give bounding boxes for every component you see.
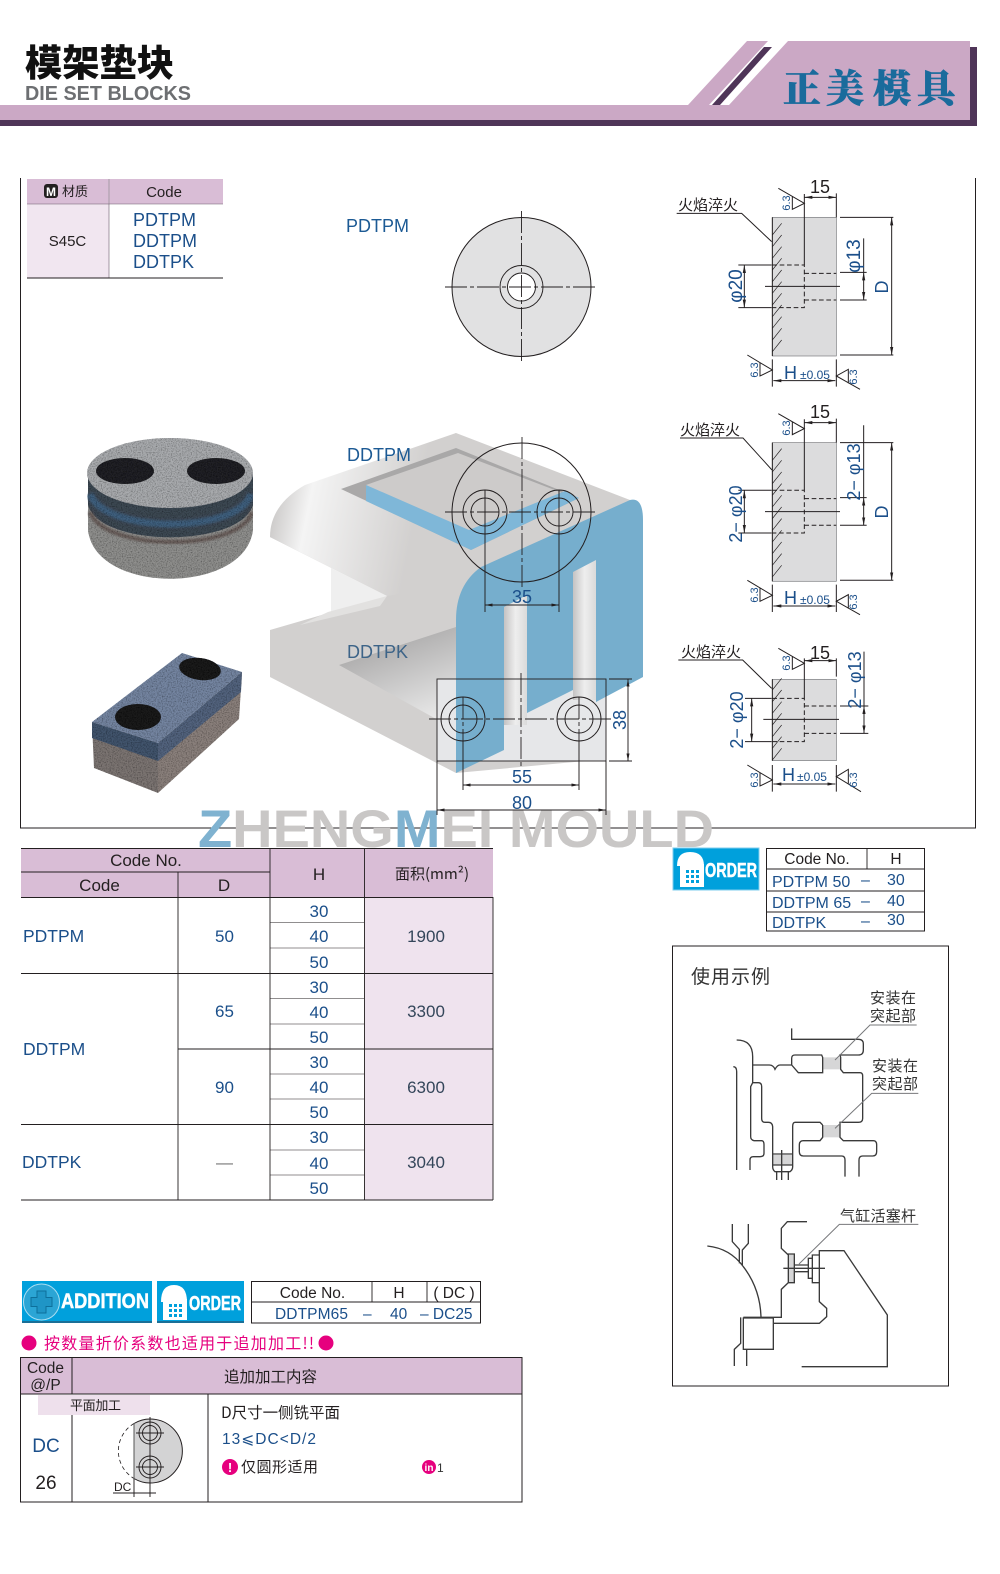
watermark: block logo [270, 433, 643, 773]
dimension H: H [782, 765, 795, 785]
D column: 50 [215, 927, 234, 946]
dimension 15: 15 [810, 402, 830, 422]
table header labels: 面积(mm²) [395, 863, 469, 884]
note: round only: 仅圆形适用 [241, 1456, 318, 1477]
icon: plus disc [24, 1284, 60, 1320]
brand name: 具 [917, 58, 962, 113]
dimension H [782, 765, 827, 785]
D column: 90 [215, 1078, 234, 1097]
diagram: flat milled circle: DC [114, 1480, 132, 1494]
dimension 35: 35 [512, 587, 532, 607]
title: english: DIE SET BLOCKS [25, 83, 191, 105]
code column: DDTPM [23, 1039, 85, 1059]
H column: 30 [310, 1128, 328, 1147]
page header band [0, 33, 977, 126]
dimension 2-phi 20: 2− φ20 [727, 691, 747, 749]
order example table: – [861, 872, 870, 889]
H column [310, 902, 328, 1198]
order badge: ORDER [705, 860, 757, 882]
surface roughness marks: 6.3 [749, 362, 761, 378]
D column: — [216, 1153, 233, 1172]
callout: mount on boss 1 [870, 987, 916, 1026]
surface roughness marks [749, 195, 860, 385]
badge: order: ORDER [189, 1293, 241, 1315]
order example table: Code No. [784, 851, 850, 868]
diagram: upper die section [733, 1025, 918, 1180]
badge: addition [22, 1281, 152, 1323]
main size table [21, 848, 493, 1200]
dimension 55: 55 [512, 767, 532, 787]
watermark text: ZHENGMEI MOULD [198, 800, 714, 859]
photo: rectangular block [92, 653, 242, 793]
code values: DDTPM [133, 231, 197, 251]
description: D尺寸一侧铣平面 [221, 1401, 340, 1423]
lead time badge [422, 1460, 444, 1475]
surface roughness marks: 6.3 [781, 195, 793, 211]
order example table: – [861, 913, 870, 930]
order example table: 30 [887, 872, 905, 889]
table header labels: Code [79, 876, 120, 895]
label: DDTPK: DDTPK [347, 642, 408, 662]
D column [215, 927, 234, 1172]
addition order example table [251, 1281, 481, 1323]
code values [133, 210, 197, 272]
code heading: Code [146, 184, 182, 201]
H column: 30 [310, 902, 328, 921]
usage heading: 使用示例 [691, 962, 770, 989]
flame hardening label: 火焰淬火 [681, 641, 741, 662]
addition order example table: 40 [390, 1306, 408, 1323]
dimension phi 20: φ20 [726, 269, 747, 303]
lead time badge: in [425, 1463, 433, 1474]
order example table: H [890, 851, 902, 868]
area column: 6300 [407, 1078, 445, 1097]
callout: mount on boss 1: 突起部 [870, 1005, 916, 1026]
drawing: DDTPM top view [445, 437, 597, 612]
dimension 80: 80 [512, 793, 532, 813]
material value: S45C [49, 233, 86, 250]
icon: phone [161, 1285, 187, 1320]
order example table [766, 848, 925, 932]
addition order example table: – [363, 1306, 372, 1323]
section drawing: DDTPK [678, 641, 868, 792]
H column: 30 [310, 978, 328, 997]
dimension 2-phi 13: 2− φ13 [844, 443, 864, 501]
order example table: 40 [887, 893, 905, 910]
surface roughness marks: 6.3 [848, 369, 860, 385]
D column: 65 [215, 1002, 234, 1021]
H column: 40 [310, 1078, 328, 1097]
dimension phi 13: φ13 [844, 239, 865, 273]
diagram: cylinder rod section [707, 1222, 918, 1367]
callout: mount on boss 2 [872, 1055, 918, 1094]
brand name: 美 [826, 58, 864, 113]
H column: 50 [310, 1028, 328, 1047]
dimension 38: 38 [610, 710, 630, 730]
surface roughness marks [749, 420, 860, 610]
label: PDTPM: PDTPM [346, 216, 409, 236]
order example table: PDTPM 50 [772, 874, 850, 891]
code column [22, 926, 85, 1172]
brand name: 正 [783, 58, 821, 113]
dimension D: D [872, 506, 892, 518]
surface roughness marks: 6.3 [749, 772, 761, 788]
surface roughness marks: 6.3 [848, 772, 860, 788]
drawing: PDTPM top view [445, 211, 597, 363]
H column: 50 [310, 1103, 328, 1122]
code column: DDTPK [22, 1152, 82, 1172]
addition order example table: Code No. [280, 1285, 345, 1302]
material heading: 材质 [62, 181, 88, 200]
H column: 40 [310, 1003, 328, 1022]
callout: mount on boss 2: 安装在 [872, 1055, 918, 1076]
icon: material badge [44, 184, 58, 199]
dimension H: ±0.05 [800, 368, 830, 382]
area column: 3300 [407, 1002, 445, 1021]
code values: DDTPK [133, 252, 194, 272]
badge: order [157, 1281, 244, 1323]
H column: 50 [310, 1179, 328, 1198]
code column: PDTPM [23, 926, 84, 946]
column header: code [27, 1360, 64, 1394]
dimension D: D [872, 280, 892, 294]
icon: material badge: M [46, 185, 56, 199]
lead time badge: 1 [437, 1461, 444, 1475]
order example table: – [861, 893, 870, 910]
table header labels: H [313, 865, 325, 884]
flame hardening label with leader: 火焰淬火 [680, 419, 740, 440]
badge: addition: ADDITION [61, 1290, 149, 1313]
diagram: flat milled circle [113, 1417, 182, 1497]
H column: 40 [310, 1154, 328, 1173]
surface roughness marks: 6.3 [781, 420, 793, 436]
dimension H: H [784, 363, 797, 383]
pink notice: 按数量折价系数也适用于追加加工!! [44, 1330, 314, 1354]
sub heading: face milling: 平面加工 [70, 1395, 121, 1414]
dimension H: ±0.05 [797, 770, 827, 784]
note: round only: ! [228, 1460, 232, 1475]
callout: mount on boss 1: 安装在 [870, 987, 916, 1008]
panel: usage example [672, 946, 948, 1386]
dimension 15: 15 [810, 643, 830, 663]
area column: 1900 [407, 927, 445, 946]
table header labels [79, 851, 469, 895]
section drawing: PDTPM [677, 177, 893, 389]
callout: mount on boss 2: 突起部 [872, 1073, 918, 1094]
dimension 2-phi 13: 2− φ13 [845, 651, 865, 709]
icon: phone [677, 852, 704, 887]
H column: 50 [310, 953, 328, 972]
dimension H: H [784, 588, 797, 608]
main panel frame [20, 178, 976, 828]
dimension H [784, 363, 830, 383]
callout: cylinder rod: 气缸活塞杆 [840, 1205, 916, 1226]
order example table: 30 [887, 912, 905, 929]
flame hardening label with leader [680, 419, 772, 470]
order example table: DDTPM 65 [772, 895, 851, 912]
condition: 13⩽DC<D/2 [222, 1431, 316, 1448]
surface roughness marks: 6.3 [781, 655, 793, 671]
flame hardening label: 火焰淬火 [678, 194, 738, 215]
table header labels: D [218, 876, 230, 895]
column header: content: 追加加工内容 [224, 1365, 317, 1387]
addition order example table: H [393, 1285, 405, 1302]
column header: code: @/P [30, 1377, 61, 1394]
price 26: 26 [35, 1473, 57, 1494]
table header labels: Code No. [110, 851, 182, 870]
section drawing: DDTPM [680, 402, 893, 615]
photo: round block [87, 438, 253, 579]
dimension 2-phi 20: 2− φ20 [726, 485, 746, 543]
surface roughness marks [749, 655, 860, 788]
addition order example table: ( DC ) [433, 1285, 475, 1302]
column header: code: Code [27, 1360, 64, 1377]
addition order example table: DDTPM65 [275, 1306, 348, 1323]
title: chinese: 模架垫块 [25, 33, 174, 87]
drawing: DDTPK top view [429, 673, 632, 815]
H column: 40 [310, 927, 328, 946]
surface roughness marks: 6.3 [848, 594, 860, 610]
order badge [673, 848, 759, 890]
code DC: DC [32, 1436, 60, 1457]
dimension H [784, 588, 830, 608]
brand name: 模 [873, 58, 911, 113]
H column: 30 [310, 1053, 328, 1072]
area column [407, 927, 445, 1172]
surface roughness marks: 6.3 [749, 587, 761, 603]
addition table [20, 1357, 522, 1502]
order example table: DDTPK [772, 915, 827, 932]
material table [27, 179, 223, 278]
addition order example table: – DC25 [420, 1306, 473, 1323]
area column: 3040 [407, 1153, 445, 1172]
dimension H: ±0.05 [800, 593, 830, 607]
brand name [783, 58, 962, 113]
label: DDTPM: DDTPM [347, 445, 411, 465]
dimension 15: 15 [810, 177, 830, 197]
code values: PDTPM [133, 210, 196, 230]
